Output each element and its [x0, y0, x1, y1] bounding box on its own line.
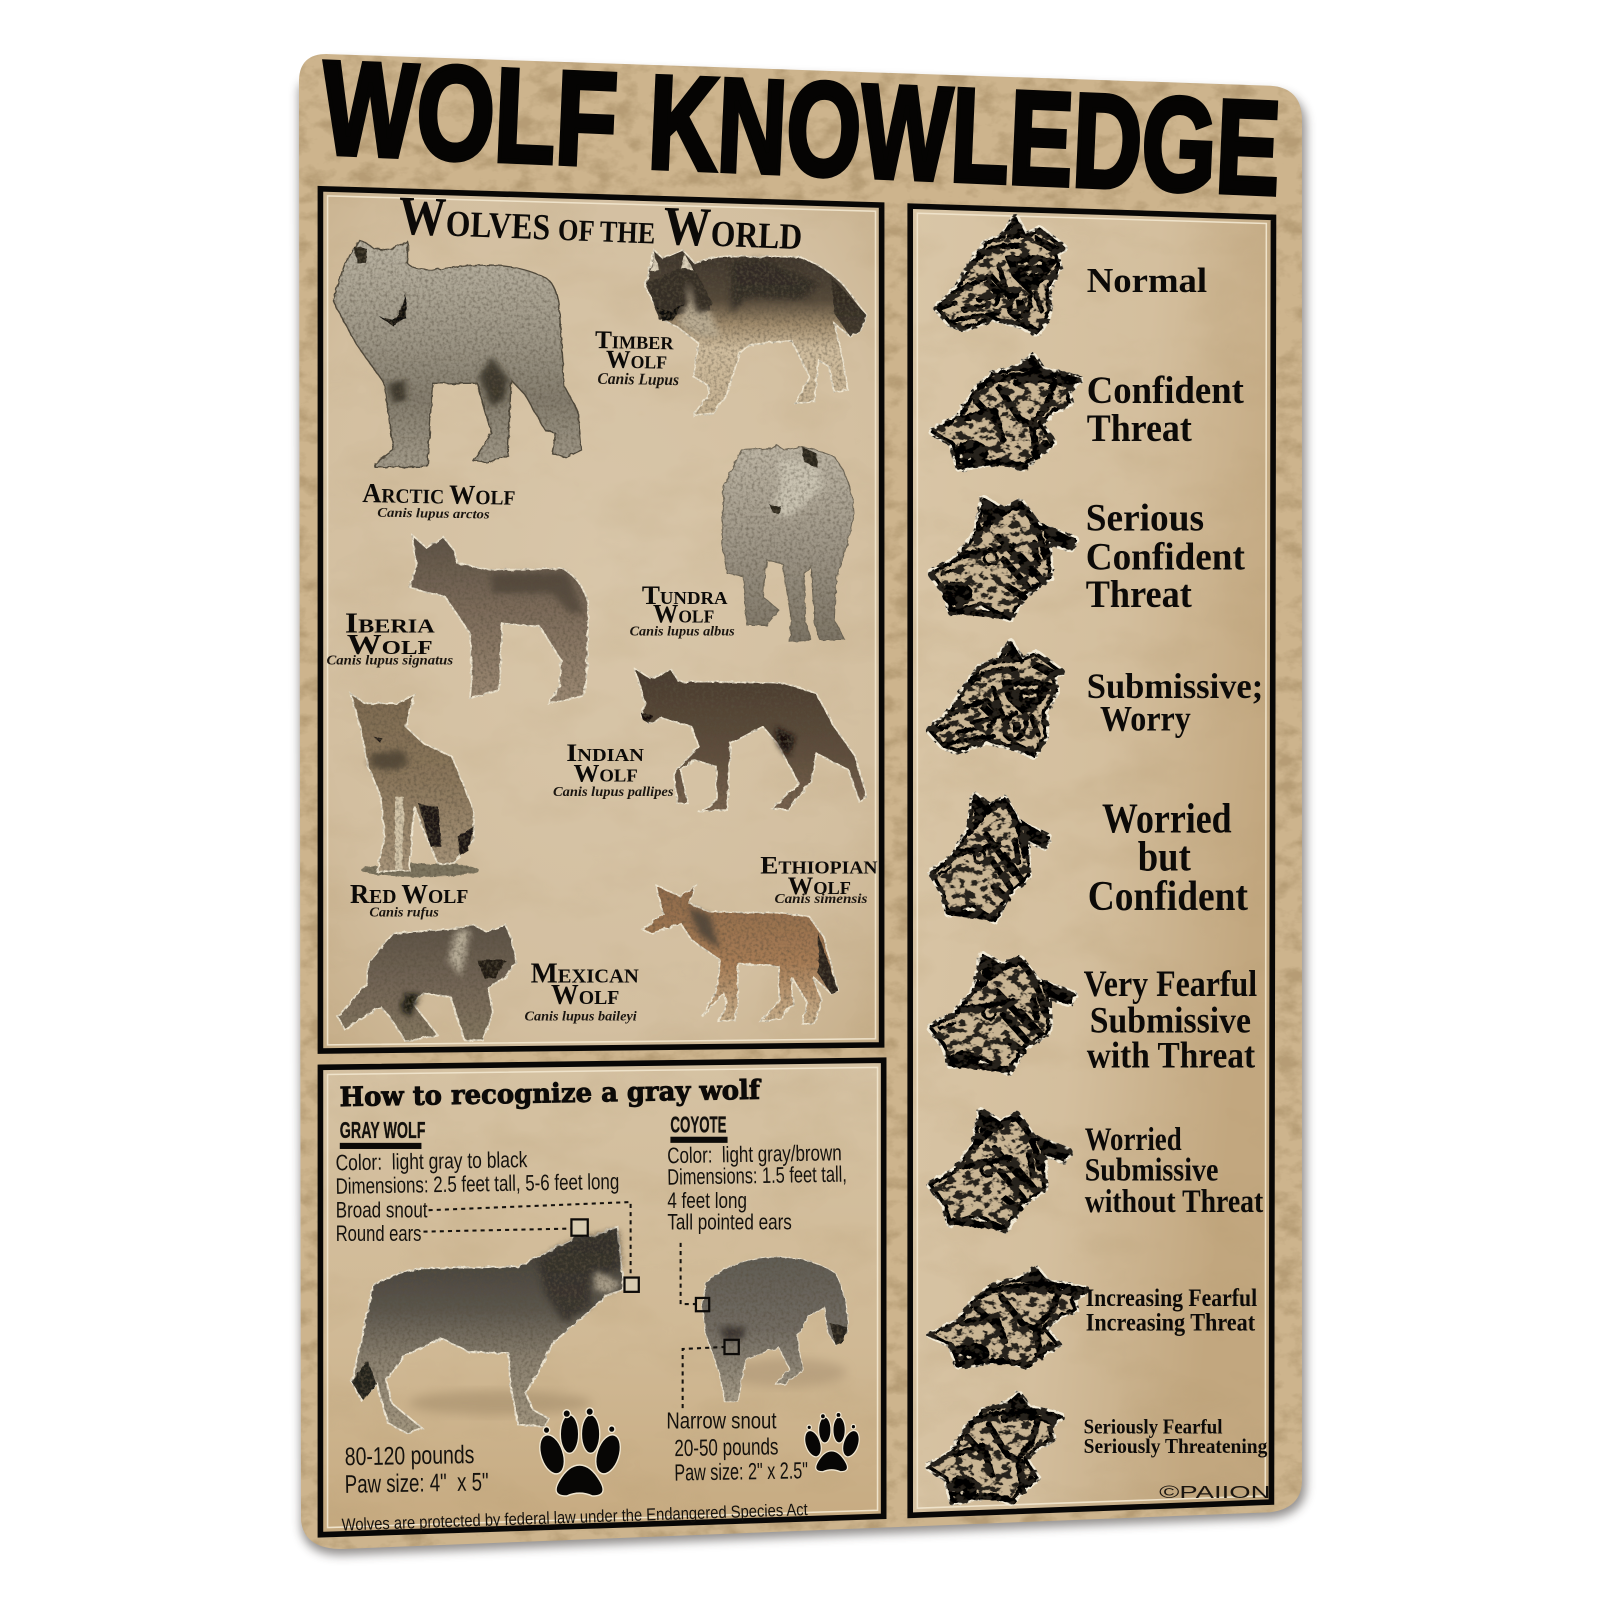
label: indian wolf: Canis lupus pallipes	[553, 784, 673, 799]
text: submissive worry	[1087, 666, 1263, 739]
label: indian wolf: INDIAN	[566, 738, 645, 767]
gray wolf weight: Paw size: 4" x 5"	[345, 1468, 489, 1499]
wolf: red	[350, 693, 479, 877]
coyote photo	[702, 1257, 848, 1402]
label: iberia wolf: IBERIA	[345, 609, 435, 640]
text: worried but confident	[1088, 797, 1248, 920]
label: mexican wolf	[524, 959, 639, 1023]
icon: serious confident threat head	[932, 500, 1075, 618]
label: red wolf: Canis rufus	[369, 904, 439, 919]
coyote weight	[666, 1408, 808, 1486]
text: very fearful submissive: with Threat	[1087, 1034, 1256, 1075]
label: mexican wolf: MEXICAN	[531, 959, 639, 990]
label: tundra wolf: TUNDRA	[642, 580, 728, 610]
wolf: tundra	[722, 445, 854, 642]
label: mexican wolf: Canis lupus baileyi	[524, 1008, 637, 1023]
label: red wolf: RED WOLF	[350, 878, 468, 909]
text: worried submissive: Worried	[1085, 1122, 1182, 1158]
heading: how to recognize: How to recognize a gray wolf	[339, 1075, 762, 1113]
coyote facts	[667, 1112, 847, 1235]
label: mexican wolf: WOLF	[551, 980, 619, 1011]
text: submissive worry: Worry	[1100, 699, 1191, 739]
gray wolf weight: 80-120 pounds	[345, 1441, 475, 1471]
text: seriously fearful	[1084, 1415, 1268, 1458]
title: WOLF	[319, 34, 620, 195]
label: indian wolf: WOLF	[573, 759, 638, 788]
text: confident threat: Confident	[1087, 369, 1244, 412]
text: submissive worry: Submissive;	[1087, 666, 1263, 706]
wolf: arctic	[332, 240, 581, 467]
gray wolf facts: Color: light gray to black	[335, 1147, 528, 1175]
coyote facts: COYOTE	[670, 1112, 727, 1138]
text: worried submissive: without Threat	[1085, 1184, 1263, 1220]
leader lines: gray wolf	[423, 1202, 631, 1276]
text: worried submissive	[1085, 1122, 1263, 1220]
text: seriously fearful: Seriously Fearful	[1084, 1415, 1222, 1439]
coyote facts: 4 feet long	[667, 1188, 747, 1213]
text: serious confident threat: Confident	[1086, 535, 1245, 578]
text: increasing fearful: Increasing Fearful	[1086, 1283, 1257, 1312]
callout squares: coyote	[696, 1298, 739, 1354]
label: timber wolf: Canis Lupus	[597, 369, 679, 389]
label: ethiopian wolf: WOLF	[788, 871, 851, 900]
coyote facts: Tall pointed ears	[667, 1210, 792, 1235]
text: worried but confident: Confident	[1088, 874, 1248, 920]
text: increasing fearful	[1086, 1283, 1257, 1337]
text: normal: Normal	[1087, 261, 1208, 300]
text: very fearful submissive	[1084, 963, 1257, 1075]
label: timber wolf: WOLF	[606, 345, 667, 375]
icon: increasing fear head	[931, 1270, 1086, 1366]
coyote weight: 20-50 pounds	[674, 1433, 779, 1461]
text: confident threat: Threat	[1087, 407, 1192, 450]
icon: very fearful head	[931, 956, 1074, 1072]
icon: normal head	[937, 218, 1064, 333]
title	[319, 34, 1283, 223]
paw: coyote	[801, 1412, 862, 1472]
label: iberia wolf	[327, 609, 453, 667]
wolf: ethiopian	[643, 885, 838, 1023]
icon: confident threat head	[933, 357, 1079, 468]
label: indian wolf	[553, 738, 673, 799]
panel: wolf expressions	[906, 202, 1279, 1520]
text: very fearful submissive: Submissive	[1090, 1000, 1251, 1041]
text: serious confident threat: Threat	[1086, 573, 1192, 616]
label: iberia wolf: Canis lupus signatus	[327, 652, 453, 667]
coyote weight: Narrow snout	[666, 1408, 777, 1434]
callout squares: gray wolf	[571, 1219, 639, 1292]
gray wolf facts: Dimensions: 2.5 feet tall, 5-6 feet long	[335, 1169, 619, 1199]
coyote weight: Paw size: 2" x 2.5"	[674, 1457, 808, 1486]
text: seriously fearful: Seriously Threatening	[1084, 1434, 1268, 1458]
leader lines: coyote	[681, 1243, 726, 1408]
gray wolf facts: Broad snout	[336, 1197, 428, 1222]
panel: wolves of the world	[316, 184, 888, 1056]
text: worried submissive: Submissive	[1085, 1153, 1218, 1189]
text: worried but confident: Worried	[1102, 797, 1232, 843]
coyote facts: Color: light gray/brown	[667, 1140, 842, 1168]
label: timber wolf: TIMBER	[595, 325, 675, 355]
panel: how to recognize a gray wolf	[316, 1056, 888, 1541]
text: serious confident threat	[1086, 497, 1245, 616]
label: ethiopian wolf: ETHIOPIAN	[760, 850, 878, 879]
label: arctic wolf: ARCTIC WOLF	[362, 477, 516, 511]
text: serious confident threat: Serious	[1086, 497, 1204, 540]
label: tundra wolf: Canis lupus albus	[630, 624, 735, 639]
icon: submissive worry head	[930, 643, 1061, 755]
label: timber wolf	[594, 325, 680, 389]
metal sign board	[291, 46, 1311, 1556]
text: very fearful submissive: Very Fearful	[1084, 963, 1257, 1004]
gray wolf facts	[335, 1117, 619, 1246]
label: iberia wolf: W OLF	[347, 630, 433, 661]
wolf: indian	[634, 668, 866, 812]
label: arctic wolf: Canis lupus arctos	[377, 505, 490, 522]
text: worried but confident: but	[1138, 834, 1191, 880]
wolf: mexican	[338, 925, 516, 1042]
label: tundra wolf	[630, 580, 735, 639]
paw: gray wolf	[535, 1408, 625, 1496]
footnote: Wolves are protected by federal law under the Endangered Species Act	[341, 1499, 808, 1535]
wolf: iberia	[409, 535, 589, 703]
gray wolf facts: GRAY WOLF	[340, 1117, 426, 1143]
text: increasing fearful: Increasing Threat	[1086, 1308, 1256, 1337]
wolf: timber	[645, 250, 866, 415]
icon: worried but confident head	[932, 796, 1049, 920]
gray wolf facts: Round ears	[336, 1221, 421, 1246]
gray wolf weight	[345, 1441, 489, 1499]
label: ethiopian wolf	[760, 850, 878, 906]
text: confident threat	[1087, 369, 1244, 450]
label: tundra wolf: WOLF	[653, 598, 714, 628]
gray wolf photo	[352, 1227, 623, 1433]
title: KNOWLEDGE	[646, 48, 1283, 223]
board shadow	[299, 61, 1306, 1555]
heading: wolves of the world: WOLVES OF THE WORLD	[397, 185, 804, 261]
copyright mark: ©PAIION	[1159, 1482, 1270, 1502]
label: ethiopian wolf: Canis simensis	[774, 891, 867, 906]
icon: worried submissive head	[931, 1112, 1069, 1230]
coyote facts: Dimensions: 1.5 feet tall,	[667, 1162, 847, 1190]
icon: seriously fearful head	[929, 1394, 1061, 1502]
